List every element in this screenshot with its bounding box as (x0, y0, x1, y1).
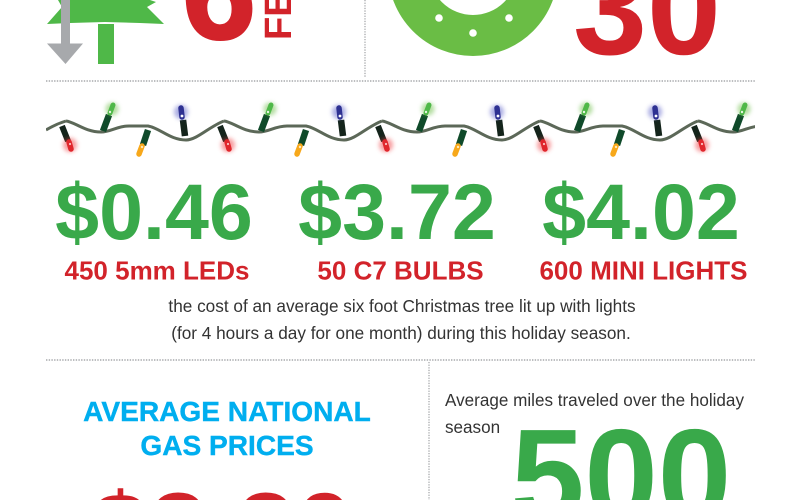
heading: gas prices: AVERAGE NATIONAL (83, 396, 371, 427)
icon: height arrow (47, 0, 83, 64)
miles caption (445, 391, 744, 437)
icon: christmas tree (47, 0, 164, 64)
miles caption: season (445, 418, 500, 437)
miles caption: Average miles traveled over the holiday (445, 391, 744, 410)
string of christmas lights (46, 102, 800, 154)
heading: gas prices: GAS PRICES (140, 430, 314, 461)
cost: mini lights: $4.02 (542, 167, 740, 256)
cost: mini lights: 600 MINI LIGHTS (539, 256, 748, 286)
cost: LEDs: $0.46 (55, 167, 253, 256)
bulbs (62, 102, 750, 154)
cost: C7 bulbs: $3.72 (298, 167, 496, 256)
heading: gas prices (83, 396, 371, 461)
vertical divider top (364, 0, 366, 78)
vertical divider bottom (428, 362, 430, 500)
cost: C7 bulbs: 50 C7 BULBS (317, 256, 484, 286)
horizontal divider one (46, 80, 755, 82)
horizontal divider two (46, 359, 755, 361)
description text (168, 296, 636, 343)
light wire (46, 121, 800, 140)
icon: wreath (408, 0, 538, 37)
description text: the cost of an average six foot Christmas tree lit up with lights (168, 296, 636, 316)
cost: LEDs: 450 5mm LEDs (65, 256, 249, 286)
description text: (for 4 hours a day for one month) during this holiday season. (171, 323, 631, 343)
